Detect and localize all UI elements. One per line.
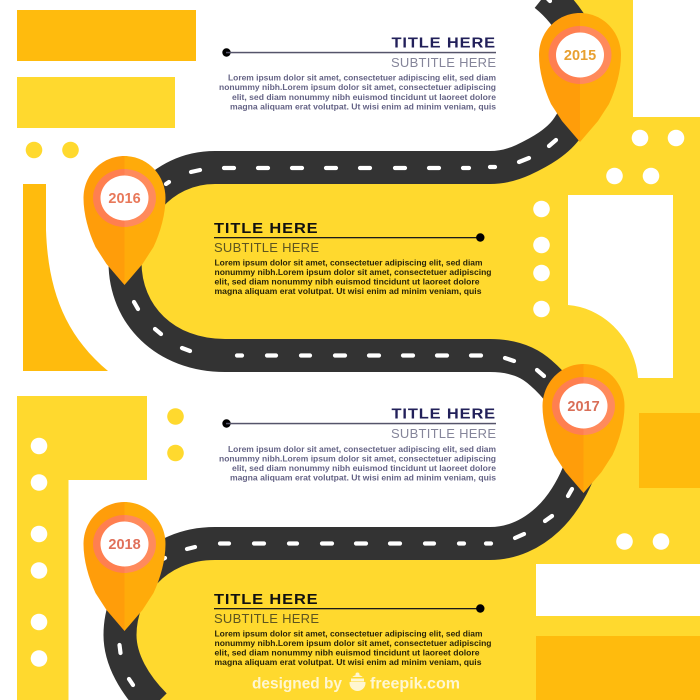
divider with dot (214, 233, 484, 242)
body text: magna aliquam erat volutpat. Ut wisi enim ad minim veniam, quis (230, 472, 496, 482)
body text: nonummy nibh.Lorem ipsum dolor sit amet, consectetuer adipiscing (219, 453, 496, 463)
body text: magna aliquam erat volutpat. Ut wisi enim ad minim veniam, quis (214, 657, 482, 667)
white block top right (633, 0, 700, 117)
divider with dot (222, 419, 496, 428)
watermark: freepik.com (370, 676, 460, 692)
body text: magna aliquam erat volutpat. Ut wisi enim ad minim veniam, quis (214, 286, 482, 296)
orange block top left (17, 10, 196, 61)
white curved block right (568, 195, 673, 378)
body text (219, 72, 496, 111)
divider with dot (214, 604, 484, 613)
body text: nonummy nibh.Lorem ipsum dolor sit amet, consectetuer adipiscing (214, 267, 492, 277)
panel: 2018 text (214, 591, 492, 667)
pin 2015: 2015 (564, 48, 596, 64)
yellow block top left (17, 77, 175, 128)
pin 2015 (539, 13, 621, 142)
pin 2016: 2016 (108, 191, 141, 207)
body text: Lorem ipsum dolor sit amet, consectetuer adipiscing elit, sed diam (214, 257, 483, 267)
subtitle: SUBTITLE HERE (214, 611, 319, 626)
heading: TITLE HERE (214, 591, 318, 608)
body text: elit, sed diam nonummy nibh euismod tincidunt ut laoreet dolore (232, 92, 496, 102)
pin 2017 (542, 364, 624, 493)
pin 2016 (84, 156, 166, 285)
orange block bottom right (536, 636, 700, 700)
body text (214, 628, 492, 667)
body text (219, 444, 496, 482)
heading: TITLE HERE (214, 220, 318, 237)
body text (214, 257, 492, 296)
orange block right (639, 413, 700, 488)
watermark: designed by (252, 676, 342, 692)
panel: 2016 text (214, 220, 492, 296)
yellow L block lower left (17, 396, 147, 700)
pin 2018: 2018 (108, 537, 141, 553)
body text: nonummy nibh.Lorem ipsum dolor sit amet, consectetuer adipiscing (219, 82, 496, 92)
yellow dots (26, 142, 184, 461)
body text: Lorem ipsum dolor sit amet, consectetuer adipiscing elit, sed diam (228, 72, 496, 82)
heading: TITLE HERE (392, 34, 496, 52)
body text: Lorem ipsum dolor sit amet, consectetuer adipiscing elit, sed diam (228, 444, 496, 454)
body text: Lorem ipsum dolor sit amet, consectetuer adipiscing elit, sed diam (214, 628, 483, 638)
pin 2018 (84, 502, 166, 631)
body text: nonummy nibh.Lorem ipsum dolor sit amet, consectetuer adipiscing (214, 638, 492, 648)
icon: freepik logo (349, 672, 366, 691)
white dots (31, 130, 684, 667)
white block lower right (536, 564, 700, 616)
subtitle: SUBTITLE HERE (391, 426, 496, 441)
panel: 2017 text (219, 406, 496, 482)
subtitle: SUBTITLE HERE (214, 240, 319, 255)
watermark (252, 672, 460, 692)
body text: elit, sed diam nonummy nibh euismod tincidunt ut laoreet dolore (232, 463, 496, 473)
winding road (120, 0, 588, 700)
panel: 2015 text (219, 34, 496, 111)
subtitle: SUBTITLE HERE (391, 55, 496, 70)
heading: TITLE HERE (392, 406, 496, 422)
pin 2017: 2017 (567, 399, 600, 415)
body text: magna aliquam erat volutpat. Ut wisi enim ad minim veniam, quis (230, 101, 496, 111)
body text: elit, sed diam nonummy nibh euismod tincidunt ut laoreet dolore (214, 648, 480, 658)
orange curved block left (23, 184, 108, 371)
body text: elit, sed diam nonummy nibh euismod tincidunt ut laoreet dolore (214, 276, 480, 286)
divider with dot (222, 48, 496, 57)
